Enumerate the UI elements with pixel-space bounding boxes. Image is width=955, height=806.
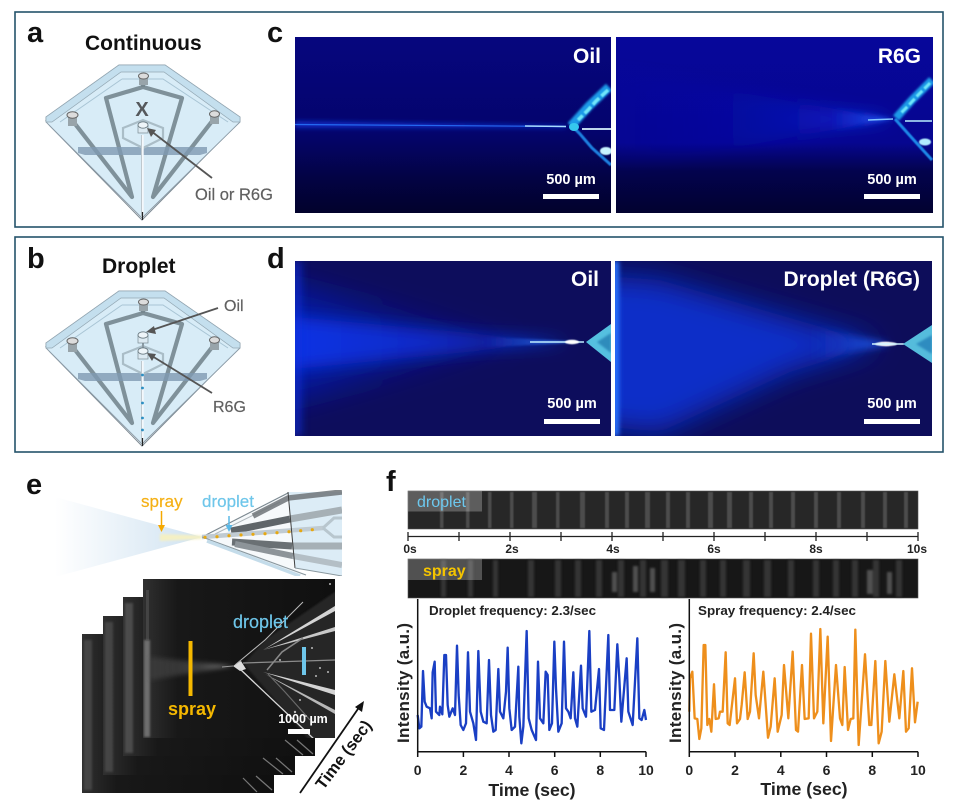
kymograph label box: spray: spray <box>423 563 466 580</box>
photo: continuous R6G <box>610 37 933 213</box>
kymograph: spray <box>408 559 918 598</box>
chart title spray: Spray frequency: 2.4/sec <box>698 604 856 618</box>
droplet x axis title: Time (sec) <box>488 780 576 800</box>
panel label f: f <box>386 466 396 498</box>
image stack frames <box>82 597 315 793</box>
scale bar d-right <box>864 396 920 424</box>
image label: spray: spray <box>168 699 216 719</box>
time axis 0-10 s: 10s <box>907 542 927 556</box>
chart: droplet frequency <box>394 599 654 800</box>
label: R6G: R6G <box>213 399 246 416</box>
panel label d: d <box>267 243 285 275</box>
droplet intensity line <box>418 631 646 743</box>
schematic: spray nozzle <box>55 492 342 577</box>
kymograph: droplet <box>408 491 918 529</box>
kymograph label box: droplet <box>408 491 482 512</box>
kymograph label box: droplet: droplet <box>417 494 466 511</box>
panel label e: e <box>26 469 42 501</box>
droplet chart axes <box>418 599 646 757</box>
droplet chart tick labels: 0 <box>414 762 422 778</box>
droplet chart tick labels: 4 <box>505 762 513 778</box>
scale bar d-left: 500 µm <box>547 396 597 412</box>
front image frame <box>143 579 335 738</box>
panel label a: a <box>27 17 44 49</box>
droplet y axis title: Intensity (a.u.) <box>394 623 413 743</box>
arrow: to R6G inlet <box>147 353 212 393</box>
spray chart tick labels <box>685 762 926 778</box>
axis label: Time (sec) rotated: Time (sec) <box>312 717 376 793</box>
arrow: spray <box>158 511 165 532</box>
photo label: Oil (c): Oil <box>573 45 601 68</box>
photo: droplet R6G <box>590 261 932 436</box>
spray marker bar <box>188 641 192 696</box>
droplet chart tick labels: 6 <box>551 762 559 778</box>
panel: continuous mode frame <box>15 12 943 227</box>
scale bar c-left: 500 µm <box>546 172 596 188</box>
scale bar c-right <box>864 172 920 199</box>
time axis 0-10 s <box>403 532 927 556</box>
spray chart axes <box>689 599 918 757</box>
label: Oil: Oil <box>224 298 244 315</box>
time axis 0-10 s: 4s <box>606 542 620 556</box>
scale bar c-left <box>543 172 599 199</box>
time axis 0-10 s: 0s <box>403 542 417 556</box>
droplet marker bar <box>302 647 306 675</box>
arrow: to Oil inlet <box>146 308 218 334</box>
kymograph label box: spray <box>408 559 482 580</box>
panel label c: c <box>267 17 283 49</box>
label: Oil or R6G: Oil or R6G <box>195 186 273 204</box>
arrow: to Oil or R6G inlet <box>147 128 212 178</box>
arrow: time <box>300 701 364 793</box>
droplet chart tick labels: 8 <box>596 762 604 778</box>
scale bar d-right: 500 µm <box>867 396 917 412</box>
spray chart tick labels: 6 <box>823 762 831 778</box>
photo: droplet oil <box>280 261 611 436</box>
label: spray: spray <box>141 492 183 511</box>
panel: droplet mode frame <box>15 237 943 452</box>
time axis 0-10 s: 6s <box>707 542 721 556</box>
heading: Droplet: Droplet <box>102 255 176 278</box>
label: droplet: droplet <box>202 492 254 511</box>
blocked inlet mark X: X <box>135 99 149 121</box>
spray chart tick labels: 8 <box>868 762 876 778</box>
image label: droplet: droplet <box>233 612 288 632</box>
scale bar d-left <box>544 396 600 424</box>
spray intensity line <box>689 629 918 745</box>
scale bar 1000 µm <box>278 712 328 734</box>
heading: Continuous: Continuous <box>85 32 202 55</box>
photo: continuous oil <box>295 37 612 213</box>
photo label: Oil (d): Oil <box>571 268 599 291</box>
time axis 0-10 s: 2s <box>505 542 519 556</box>
spray chart tick labels: 0 <box>685 762 693 778</box>
droplet chart tick labels: 10 <box>638 762 654 778</box>
device diagram: continuous <box>46 65 240 220</box>
photo label: R6G (c): R6G <box>878 45 921 68</box>
chart title droplet: Droplet frequency: 2.3/sec <box>429 604 596 618</box>
scale bar c-right: 500 µm <box>867 172 917 188</box>
arrow: droplet <box>226 516 232 532</box>
spray x axis title: Time (sec) <box>760 779 848 799</box>
spray y axis title: Intensity (a.u.) <box>666 623 685 743</box>
spray chart tick labels: 10 <box>910 762 926 778</box>
chart: spray frequency <box>666 599 926 799</box>
time axis 0-10 s: 8s <box>809 542 823 556</box>
spray chart tick labels: 2 <box>731 762 739 778</box>
scale bar 1000 µm: 1000 µm <box>278 712 328 726</box>
photo label: Droplet (R6G): Droplet (R6G) <box>784 268 920 291</box>
droplet chart tick labels: 2 <box>460 762 468 778</box>
device diagram: droplet <box>46 291 240 446</box>
spray chart tick labels: 4 <box>777 762 785 778</box>
panel label b: b <box>27 243 45 275</box>
droplet chart tick labels <box>414 762 654 778</box>
